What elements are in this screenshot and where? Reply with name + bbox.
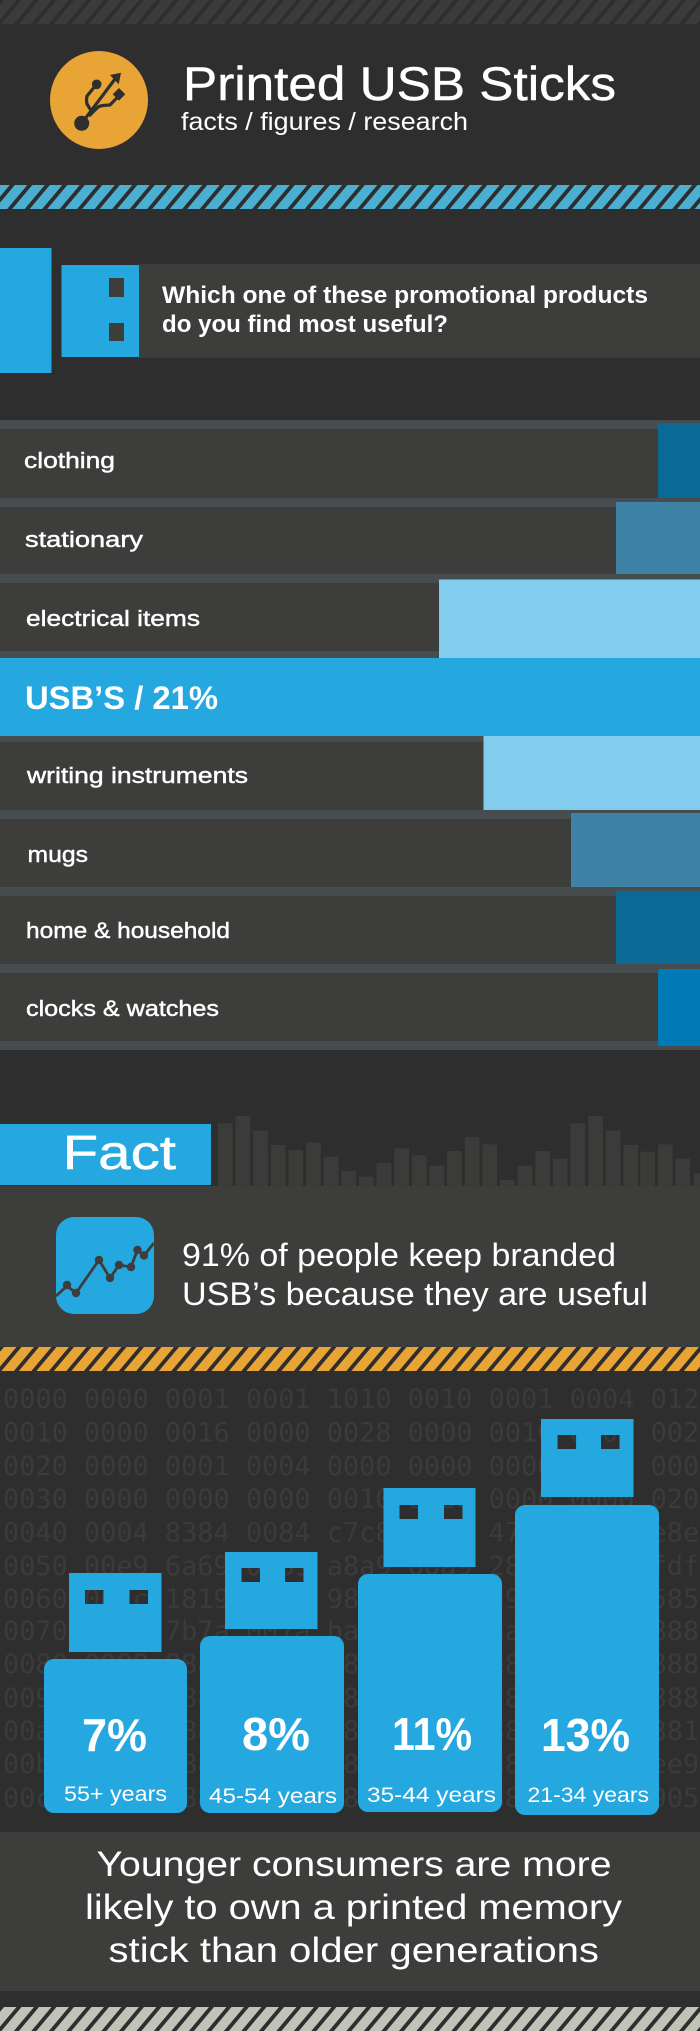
question text: do you find most useful? (162, 311, 448, 338)
fact text (182, 1237, 648, 1312)
bar: 35-44 years 11% (358, 1488, 502, 1812)
bar: 45-54 years 8%: 8% (242, 1708, 310, 1760)
conclusion panel: stick than older generations (108, 1930, 599, 1970)
icon: USB stick body (0, 248, 52, 373)
skyline bars (218, 1116, 700, 1187)
row: USB's highlight (0, 658, 700, 736)
row: mugs (0, 810, 700, 891)
title: Printed USB Sticks (183, 57, 616, 110)
bar: 21-34 years 13% (515, 1419, 659, 1815)
row: clothing (0, 420, 700, 502)
row: stationary: stationary (25, 527, 144, 552)
bar: 21-34 years 13%: 13% (541, 1709, 630, 1761)
bar: 55+ years 7%: 55+ years (64, 1782, 167, 1806)
row: USB's highlight: USB’S / 21% (25, 680, 218, 716)
bar: 55+ years 7%: 7% (82, 1709, 147, 1761)
row: writing instruments (0, 736, 700, 813)
bar: 35-44 years 11%: 11% (392, 1708, 472, 1760)
subtitle: facts / figures / research (181, 108, 468, 136)
question background bar (139, 264, 700, 358)
bar: 45-54 years 8% (200, 1552, 344, 1813)
icon: USB symbol in orange circle (50, 51, 148, 149)
bar: 45-54 years 8%: 45-54 years (209, 1784, 337, 1808)
conclusion panel: likely to own a printed memory (85, 1887, 622, 1927)
hex code background: 0030 0000 0000 0000 0010 0000 0000 0000 0204 (3, 1484, 700, 1515)
hex code background: 0060 00fc 1819 0019 9898 0098 d9d8 00d8 5857 (3, 1584, 700, 1615)
fact heading: Fact (62, 1127, 176, 1180)
bottom hazard stripe (0, 2007, 700, 2031)
row: writing instruments: writing instruments (26, 763, 248, 788)
hex code background: 0010 0000 0016 0000 0028 0000 0010 0000 0020 (3, 1418, 700, 1448)
question text (162, 282, 648, 338)
hex code background: 00a0 0088 a888 8888 8888 8888 8888 8888 8818 (3, 1716, 700, 1747)
fact text: 91% of people keep branded (182, 1237, 616, 1273)
hex code background: 0050 00e9 6a69 0069 a8a9 00a9 2828 0028 fdfc (3, 1551, 700, 1582)
icon: USB connector (62, 265, 139, 357)
fact panel background (0, 1186, 700, 1347)
bar: 21-34 years 13%: 21-34 years (528, 1783, 649, 1807)
conclusion panel: Younger consumers are more (96, 1844, 612, 1884)
hex code background: 00b0 0088 8888 8883 8888 8888 8888 8888 ee98 (3, 1749, 700, 1780)
row: clothing: clothing (24, 448, 115, 473)
conclusion panel (0, 1832, 700, 1991)
row: home & household: home & household (26, 918, 230, 943)
question text: Which one of these promotional products (162, 282, 648, 309)
fact panel (0, 1116, 700, 1347)
hex code background: 0070 0057 7b7a 007a baba 00ba 8a8a 008a 8888 (3, 1616, 700, 1647)
chart: promotional product ranking (0, 420, 700, 1050)
hex code background: 0000 0000 0001 0001 1010 0010 0001 0004 0128 (3, 1384, 700, 1415)
top hazard stripe (0, 0, 700, 24)
hex code background: 0090 0088 7888 8888 8888 8888 7888 8888 8888 (3, 1683, 700, 1714)
blue hazard stripe (0, 185, 700, 209)
fact heading (0, 1124, 211, 1185)
icon: line chart (56, 1217, 154, 1314)
row: electrical items: electrical items (26, 606, 200, 631)
fact text: USB’s because they are useful (182, 1276, 648, 1312)
bar: 55+ years 7% (44, 1573, 187, 1813)
hex code background: 00c0 0088 8888 8889 8888 8888 8888 8888 9058 (3, 1783, 700, 1814)
row: clocks & watches: clocks & watches (26, 996, 219, 1021)
hex code background: 0040 0004 8384 0084 c7c8 00c8 4748 0048 e8e9 (3, 1518, 700, 1548)
row: home & household (0, 887, 700, 969)
header (50, 51, 616, 149)
hex code background (3, 1384, 700, 1814)
row: clocks & watches (0, 964, 700, 1050)
hex code background: 0020 0000 0001 0004 0000 0000 0000 0000 0000 (3, 1451, 700, 1482)
row: stationary (0, 498, 700, 580)
hex code background: 0080 0088 8888 8888 8888 8888 e888 8888 8888 (3, 1649, 700, 1680)
question panel with USB connector (0, 248, 700, 373)
row: electrical items (0, 574, 700, 658)
row: mugs: mugs (28, 842, 88, 867)
orange hazard stripe (0, 1347, 700, 1371)
chart: ownership by age group (44, 1419, 659, 1815)
bar: 35-44 years 11%: 35-44 years (367, 1783, 496, 1807)
